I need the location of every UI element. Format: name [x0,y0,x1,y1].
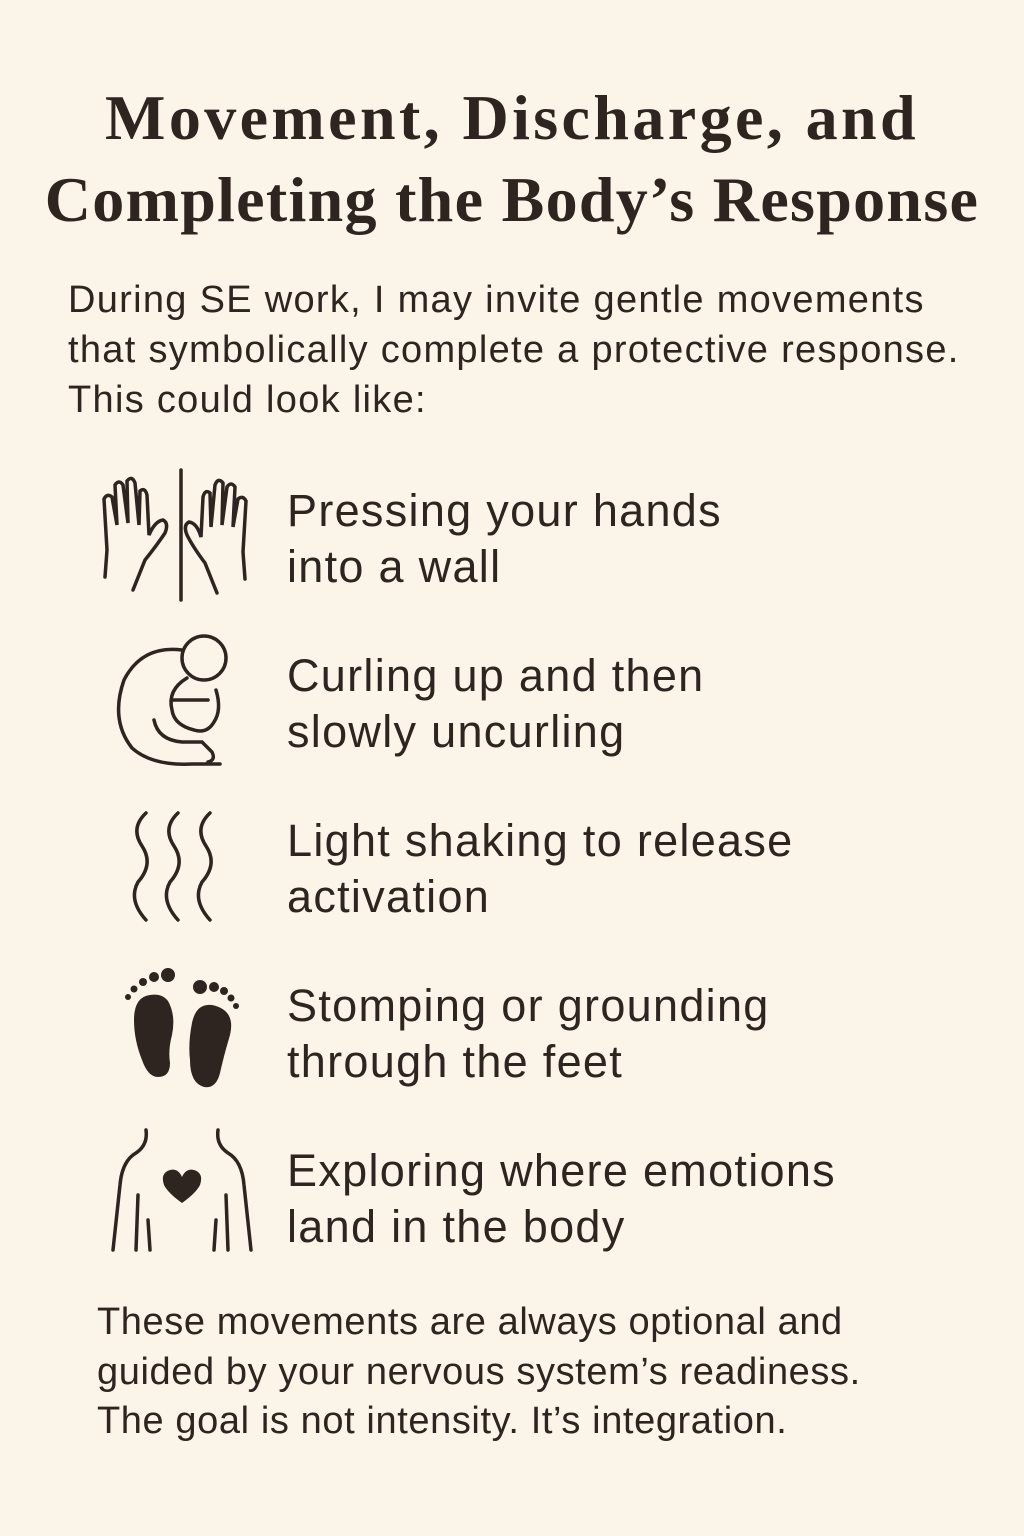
intro text [68,279,960,421]
title: Movement, Discharge, and [105,82,919,153]
item 4: Stomping or grounding [287,980,770,1031]
item 5: Exploring where emotions [287,1145,836,1196]
intro text: that symbolically complete a protective response. [68,329,960,371]
closing text: These movements are always optional and [97,1301,843,1343]
title: Completing the Body’s Response [45,164,979,235]
item 4 [287,980,770,1087]
item 2: slowly uncurling [287,706,625,757]
closing text [97,1301,861,1442]
item 1 [287,485,722,592]
icon: hands pressing wall [102,468,248,602]
item 2: Curling up and then [287,650,704,701]
closing text: guided by your nervous system’s readiness. [97,1350,861,1392]
item 2 [287,650,704,757]
item 3: Light shaking to release [287,815,794,866]
icon: torso with heart [111,1128,253,1252]
closing text: The goal is not intensity. It’s integration. [97,1400,787,1442]
item 3 [287,815,794,922]
item 4: through the feet [287,1036,623,1087]
item 5: land in the body [287,1201,626,1252]
intro text: This could look like: [68,379,427,421]
item 1: into a wall [287,541,501,592]
title [45,82,979,235]
item 1: Pressing your hands [287,485,722,536]
item 5 [287,1145,836,1252]
icon: shaking waves [132,811,213,922]
item 3: activation [287,871,490,922]
icon: curled figure [116,634,228,766]
intro text: During SE work, I may invite gentle movements [68,279,925,321]
icon: footprints [125,968,239,1088]
